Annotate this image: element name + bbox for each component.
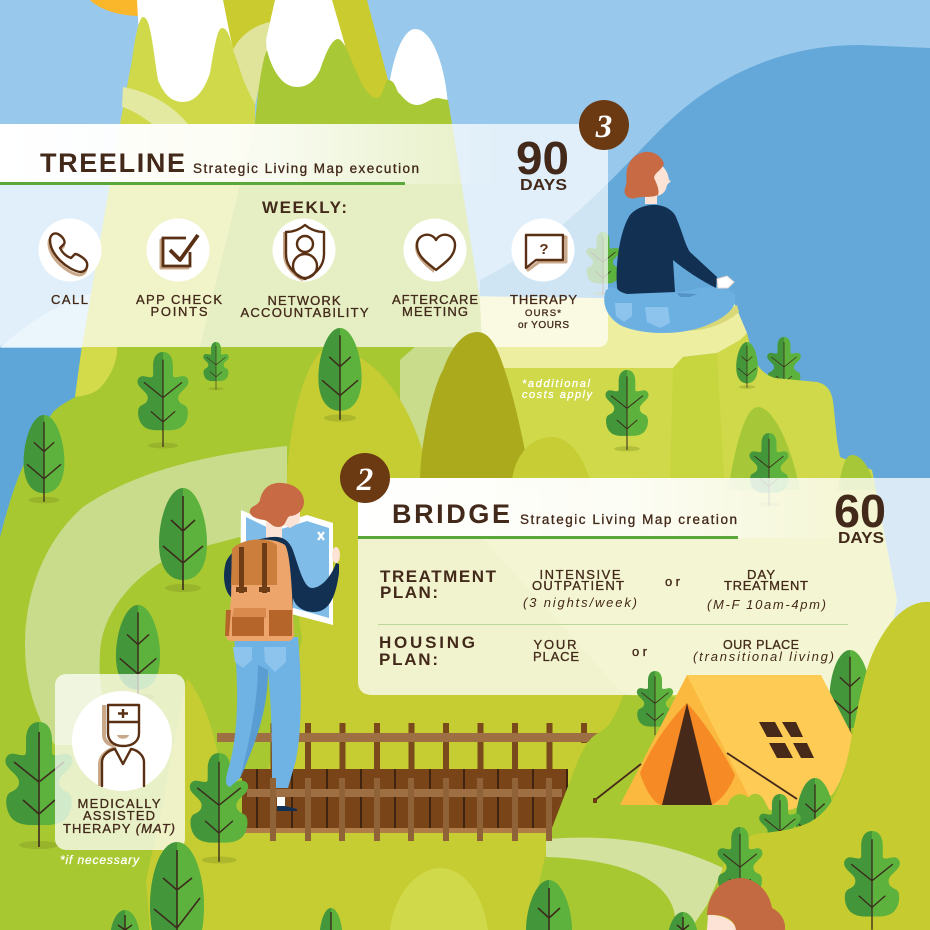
item: therapy: ? <box>539 241 549 258</box>
leg crease <box>677 293 697 297</box>
subheading: treeline: Strategic Living Map execution <box>193 161 419 176</box>
tree: bottom left small <box>111 910 139 930</box>
option: day treatment <box>707 567 826 612</box>
subheading: bridge: Strategic Living Map creation <box>520 512 737 527</box>
map marker <box>318 532 324 540</box>
option: intensive outpatient: OUTPATIENT <box>532 578 624 593</box>
treatment plan label: PLAN: <box>380 583 438 602</box>
hair <box>625 152 664 198</box>
torso <box>617 205 717 294</box>
step badge 3: 3 <box>595 109 612 145</box>
land: small hill behind bridge panel <box>510 437 590 490</box>
land: slope slab <box>670 353 724 480</box>
olive back ridge <box>223 0 388 105</box>
tree: bottom by green slope <box>526 880 572 930</box>
icon: doctor <box>72 691 172 791</box>
duration: 90 days: DAYS <box>520 177 567 194</box>
ledge shadow <box>680 305 739 331</box>
sock <box>277 796 285 807</box>
item: network accountability: NETWORK <box>268 293 341 308</box>
face <box>652 162 671 196</box>
land: pale shoulder by lake <box>75 345 117 397</box>
hand <box>332 547 340 563</box>
navy top <box>224 537 339 640</box>
item: app check points: POINTS <box>150 304 208 319</box>
item: network accountability <box>240 218 369 320</box>
housing plan label <box>379 633 475 669</box>
panel background <box>0 124 608 347</box>
heading: treeline: TREELINE <box>40 148 185 178</box>
tent ropes <box>595 753 797 800</box>
item: aftercare meeting <box>392 218 478 319</box>
mountain with snow peaks <box>82 0 482 347</box>
green rule <box>0 182 405 185</box>
title band <box>0 124 500 184</box>
land: green slope by tent <box>527 695 800 930</box>
distant hill behind panel <box>0 290 110 348</box>
item: call: CALL <box>51 292 88 307</box>
item: therapy: OURS* <box>525 308 561 319</box>
map inner <box>246 517 329 618</box>
footnote: if necessary: *if necessary <box>60 853 140 867</box>
rope peg <box>593 798 597 803</box>
tree behind MAT panel <box>116 605 160 701</box>
back fence posts <box>236 723 587 778</box>
item: aftercare meeting: MEETING <box>402 304 468 319</box>
pale trail near tent <box>546 838 723 930</box>
jeans pockets <box>615 303 670 328</box>
land: pale summit ledge <box>430 296 747 370</box>
right green flank <box>200 39 482 347</box>
divider <box>378 624 848 625</box>
MAT label: MEDICALLY <box>78 796 161 811</box>
jeans shade <box>240 665 268 778</box>
pale bottom hill <box>390 868 488 930</box>
meditating person <box>604 152 735 333</box>
water: right bay <box>480 45 930 620</box>
winding pale trail <box>25 446 287 745</box>
tree: bottom by hiker head <box>669 912 697 930</box>
costs footnote <box>522 378 594 401</box>
trees beside tent <box>759 778 834 868</box>
left green flank <box>82 17 258 347</box>
housing plan label: PLAN: <box>379 650 438 669</box>
face <box>284 512 300 528</box>
or: or <box>632 644 648 659</box>
backpack <box>225 539 294 641</box>
hill in front of dark olive hill <box>512 437 590 480</box>
jeans pockets <box>233 647 286 672</box>
or: or <box>665 574 681 589</box>
panel background <box>358 478 930 695</box>
item: aftercare meeting: AFTERCARE <box>392 292 478 307</box>
option: your place: PLACE <box>533 649 579 664</box>
option: intensive outpatient: INTENSIVE <box>540 567 621 582</box>
hand <box>717 276 734 288</box>
MAT label: THERAPY (MAT) <box>63 821 175 836</box>
option: our place <box>693 638 834 664</box>
bridge deck <box>242 769 568 828</box>
green rule <box>358 536 738 539</box>
land: sunny slope <box>400 333 897 700</box>
tent <box>593 675 852 810</box>
treatment plan label: TREATMENT <box>380 567 497 586</box>
item: app check points: APP CHECK <box>136 292 222 307</box>
tree: bottom small centre <box>320 908 342 930</box>
third person's head at bottom edge <box>707 878 785 930</box>
item: therapy: or YOURS <box>518 320 569 331</box>
neck <box>266 522 282 540</box>
tree lower left <box>5 722 73 849</box>
deck bottom plank <box>242 828 554 833</box>
deck planks <box>256 769 568 828</box>
bridge front rail and posts <box>247 778 562 841</box>
option: day treatment: TREATMENT <box>724 578 808 593</box>
tree behind cliff <box>767 337 801 400</box>
tent door <box>662 703 712 805</box>
title band <box>358 478 858 538</box>
duration: 90 days: 90 <box>516 132 569 184</box>
step badge 2: 2 <box>356 462 373 498</box>
low shrubs by tent <box>728 794 772 815</box>
panel: bridge <box>358 478 930 695</box>
land: right olive blob <box>706 602 930 930</box>
land: far right knoll <box>838 455 876 490</box>
jeans <box>226 637 301 788</box>
neck <box>645 195 657 204</box>
step badge 2 <box>340 453 390 503</box>
item: network accountability: ACCOUNTABILITY <box>240 305 369 320</box>
option: intensive outpatient: (3 nights/week) <box>523 595 637 610</box>
duration: 60 days: 60 <box>834 485 886 537</box>
sun <box>90 0 140 16</box>
panel: treeline <box>0 124 608 347</box>
tree: bottom large <box>150 842 204 930</box>
tree left of tent <box>637 671 673 735</box>
land: olive hill centre <box>146 347 640 930</box>
option: day treatment: (M-F 10am-4pm) <box>707 597 826 612</box>
tent front <box>620 675 753 805</box>
item: app check points <box>136 218 222 319</box>
tent door flaps <box>640 703 735 805</box>
tree behind blob <box>830 650 870 738</box>
tree behind bridge panel <box>750 433 788 507</box>
trees: forest upper <box>24 328 758 592</box>
shoe <box>277 806 297 811</box>
costs footnote: *additional <box>522 378 591 390</box>
land: olive patch left of bridge <box>146 678 245 882</box>
tree on the bridge edge <box>190 753 248 863</box>
housing plan label: HOUSING <box>379 633 475 652</box>
weekly label: WEEKLY: <box>262 198 347 217</box>
pale band beside dark hill <box>400 345 462 458</box>
tent window <box>759 722 814 758</box>
hiker with map <box>224 483 340 811</box>
option: your place <box>533 637 579 664</box>
option: your place: YOUR <box>534 637 576 652</box>
faded tree behind panel <box>586 232 620 296</box>
pale swoosh <box>122 87 188 124</box>
pale back ridge <box>233 22 270 105</box>
trees: right foreground <box>718 827 900 930</box>
legs <box>604 287 735 333</box>
MAT label: ASSISTED <box>83 808 155 823</box>
heading: bridge: BRIDGE <box>392 499 510 529</box>
map <box>240 510 333 625</box>
option: intensive outpatient <box>523 567 637 610</box>
land: small hill right <box>728 407 800 490</box>
bridge <box>217 723 602 833</box>
hair <box>250 483 304 527</box>
land: main hillside <box>0 340 880 930</box>
option: our place: (transitional living) <box>693 649 834 664</box>
dark olive hill <box>420 332 530 478</box>
item: therapy: THERAPY <box>510 292 577 307</box>
panel background <box>55 674 185 850</box>
panel: medically assisted therapy <box>55 674 185 850</box>
costs footnote: costs apply <box>522 389 594 401</box>
duration: 60 days: DAYS <box>838 530 884 547</box>
option: day treatment: DAY <box>747 567 775 582</box>
water: left lake <box>0 345 120 545</box>
item: therapy <box>510 218 577 331</box>
snow peaks <box>137 0 448 110</box>
back fence rail <box>217 733 602 742</box>
MAT label <box>63 796 175 836</box>
item: call <box>38 218 102 307</box>
treatment plan label <box>380 567 497 602</box>
step badge 3 <box>579 100 629 150</box>
option: our place: OUR PLACE <box>723 638 799 652</box>
tent side <box>687 675 852 810</box>
